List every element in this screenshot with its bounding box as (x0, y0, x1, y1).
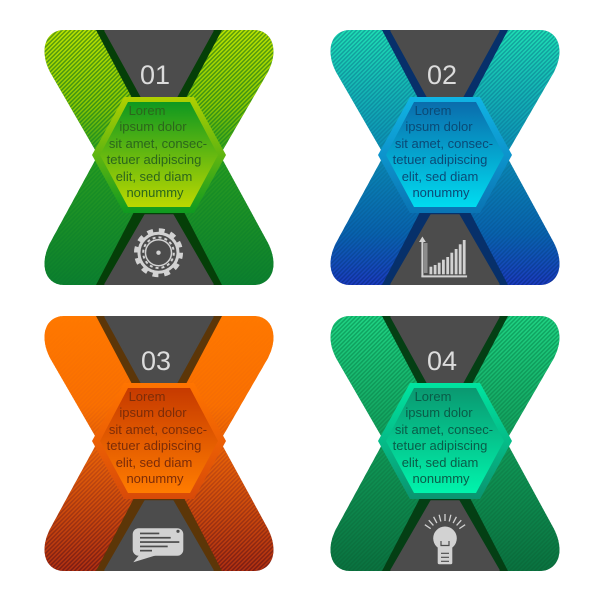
body text: Lorem (415, 389, 451, 404)
bottom wedge border (382, 498, 508, 571)
body text: ipsum dolor (405, 405, 473, 420)
bottom wedge (105, 501, 213, 570)
bottom wedge (391, 215, 499, 284)
number: 04 (427, 346, 457, 376)
body text: elit, sed diam (116, 169, 192, 184)
body text: nonummy (126, 185, 184, 200)
body text: Lorem (129, 389, 165, 404)
bottom wedge border (96, 498, 222, 571)
number: 02 (427, 60, 457, 90)
number: 01 (140, 60, 170, 90)
X shape (45, 316, 273, 571)
bottom wedge (391, 501, 499, 570)
icon: light bulb (425, 514, 465, 564)
bottom wedge (105, 215, 213, 284)
panel: 03 speech (45, 316, 273, 571)
top wedge (391, 31, 499, 98)
X shape (45, 30, 273, 285)
top wedge (105, 31, 213, 98)
top wedge (105, 317, 213, 384)
body text (107, 103, 207, 200)
body text (393, 389, 493, 486)
body text: tetuer adipiscing (393, 438, 487, 453)
body text: ipsum dolor (119, 119, 187, 134)
body text: elit, sed diam (116, 455, 192, 470)
X shape stripes (45, 316, 273, 571)
body text: sit amet, consec- (109, 422, 207, 437)
body text: Lorem (415, 103, 451, 118)
top wedge border (382, 30, 508, 98)
body text: elit, sed diam (402, 455, 478, 470)
icon: bar chart (419, 236, 467, 277)
hexagon inner (100, 102, 218, 207)
X shape stripes (331, 30, 559, 285)
body text: tetuer adipiscing (107, 438, 201, 453)
panel: 02 chart (331, 30, 559, 285)
panel: 04 idea (331, 316, 559, 571)
hexagon inner (386, 388, 504, 493)
body text: ipsum dolor (119, 405, 187, 420)
icon: gear (136, 230, 181, 275)
body text: Lorem (129, 103, 165, 118)
body text: elit, sed diam (402, 169, 478, 184)
hexagon outer (92, 97, 226, 213)
body text: tetuer adipiscing (393, 152, 487, 167)
body text: ipsum dolor (405, 119, 473, 134)
X shape stripes (45, 30, 273, 285)
body text: nonummy (412, 471, 470, 486)
X shape (331, 30, 559, 285)
X shape stripes (331, 316, 559, 571)
X shape (331, 316, 559, 571)
body text: sit amet, consec- (395, 136, 493, 151)
hexagon inner (386, 102, 504, 207)
number: 03 (141, 346, 171, 376)
icon: speech bubble (133, 528, 183, 562)
hexagon inner (100, 388, 218, 493)
top wedge (391, 317, 499, 384)
body text: nonummy (126, 471, 184, 486)
bottom wedge border (382, 212, 508, 285)
hexagon outer (378, 383, 512, 499)
top wedge border (382, 316, 508, 384)
bottom wedge border (96, 212, 222, 285)
body text (107, 389, 207, 486)
body text: sit amet, consec- (395, 422, 493, 437)
hexagon outer (378, 97, 512, 213)
hexagon outer (92, 383, 226, 499)
top wedge border (96, 30, 222, 98)
body text: tetuer adipiscing (107, 152, 201, 167)
panel: 01 settings (45, 30, 273, 285)
body text: nonummy (412, 185, 470, 200)
body text (393, 103, 493, 200)
top wedge border (96, 316, 222, 384)
body text: sit amet, consec- (109, 136, 207, 151)
